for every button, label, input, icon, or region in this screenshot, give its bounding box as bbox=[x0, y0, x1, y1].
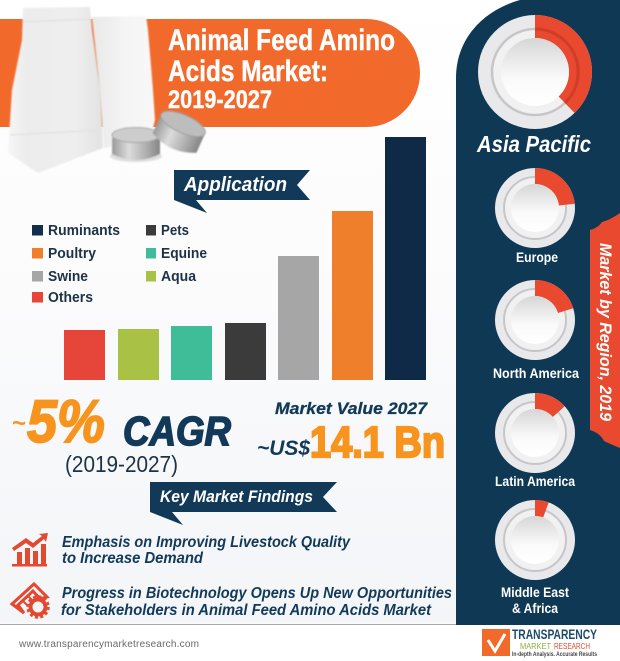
image: product bags and cans bbox=[8, 7, 209, 173]
stat: CAGR: ~ bbox=[12, 410, 26, 437]
label: Asia Pacific: Asia Pacific bbox=[476, 131, 591, 157]
tab: market by region bbox=[590, 213, 620, 448]
finding 2 text: for Stakeholders in Animal Feed Amino Acids Market bbox=[61, 602, 432, 619]
logo: Transparency Market Research: RESEARCH bbox=[554, 641, 590, 651]
stat: market value: ~US$ bbox=[257, 437, 310, 460]
logo: Transparency Market Research: In-depth Analysis. Accurate Results bbox=[512, 651, 597, 658]
can tilted bbox=[150, 106, 209, 158]
title bbox=[168, 24, 395, 114]
label: Middle East and Africa bbox=[501, 585, 569, 616]
footer: website: www.transparencymarketresearch.com bbox=[18, 639, 199, 650]
title: Animal Feed Amino bbox=[168, 24, 395, 57]
stat: CAGR bbox=[12, 388, 231, 477]
finding 2 text bbox=[61, 585, 452, 619]
label: Middle East and Africa: Middle East bbox=[501, 585, 569, 600]
banner: Application bbox=[174, 170, 310, 213]
stat: market value: 14.1 Bn bbox=[310, 418, 445, 467]
legend: Ruminants: Ruminants bbox=[48, 223, 120, 239]
label: North America: North America bbox=[493, 366, 579, 381]
stat: CAGR: CAGR bbox=[123, 408, 231, 454]
banner: Key Market Findings: Key Market Findings bbox=[160, 487, 313, 506]
finding 1 text: Emphasis on Improving Livestock Quality bbox=[62, 534, 351, 551]
legend: Equine: Equine bbox=[161, 246, 207, 262]
legend: Aqua: Aqua bbox=[161, 269, 197, 285]
legend: Pets: Pets bbox=[161, 223, 189, 239]
stat: market value bbox=[257, 400, 445, 467]
legend: Swine: Swine bbox=[48, 269, 88, 285]
donut: Middle East and Africa bbox=[495, 500, 575, 580]
can upright bbox=[110, 128, 162, 162]
legend: Poultry: Poultry bbox=[48, 246, 96, 262]
banner: Application: Application bbox=[183, 174, 287, 196]
legend: Others: Others bbox=[48, 290, 93, 306]
title: 2019-2027 bbox=[168, 86, 272, 114]
stat: CAGR: 5% bbox=[27, 388, 105, 455]
front bag bbox=[8, 7, 103, 173]
finding 1 text: to Increase Demand bbox=[62, 550, 204, 567]
icon: rising bar chart bbox=[12, 533, 48, 566]
legend: Pets bbox=[146, 223, 189, 239]
stat: market value: Market Value 2027 bbox=[275, 400, 428, 418]
donut: Asia Pacific bbox=[478, 15, 592, 129]
panel: market by region bbox=[456, 0, 620, 625]
title: Acids Market: bbox=[168, 55, 328, 88]
back bag bbox=[92, 16, 155, 148]
tab: market by region: Market by Region, 2019 bbox=[596, 243, 614, 422]
donut: North America bbox=[495, 280, 575, 360]
icon: DNA and gear bbox=[12, 584, 48, 618]
finding 2 text: Progress in Biotechnology Opens Up New Opportunities bbox=[62, 585, 452, 602]
label: Middle East and Africa: & Africa bbox=[512, 601, 558, 616]
banner: Key Market Findings bbox=[150, 482, 337, 525]
label: Europe: Europe bbox=[516, 250, 558, 265]
logo: Transparency Market Research bbox=[482, 626, 597, 658]
legend bbox=[32, 223, 207, 306]
legend: Swine bbox=[32, 269, 88, 285]
footer rule bbox=[0, 624, 456, 625]
bar chart bbox=[64, 137, 426, 380]
stat: CAGR: (2019-2027) bbox=[65, 451, 178, 477]
donut: Europe bbox=[495, 168, 575, 248]
logo: Transparency Market Research: MARKET bbox=[520, 641, 551, 651]
label: Latin America: Latin America bbox=[495, 474, 575, 489]
logo mark bbox=[482, 629, 510, 656]
header: orange title band bbox=[0, 19, 420, 127]
finding 1 text bbox=[62, 534, 351, 567]
donut: Latin America bbox=[495, 393, 575, 473]
